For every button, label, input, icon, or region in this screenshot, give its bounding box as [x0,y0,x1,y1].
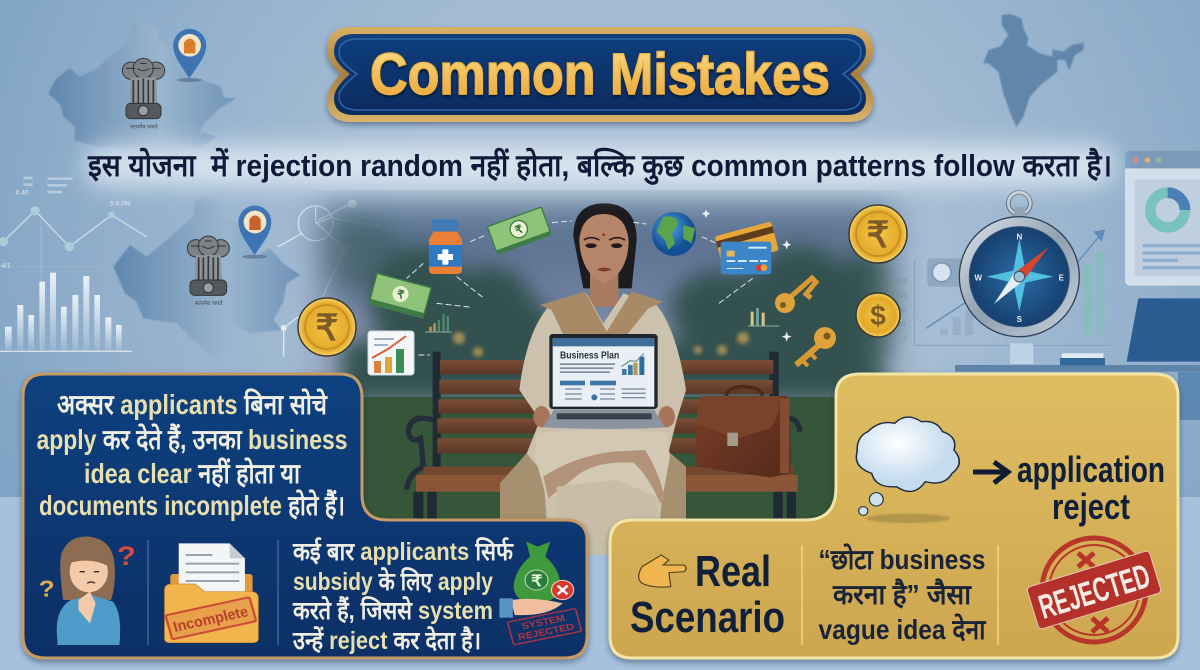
emblem upper: सत्यमेव जयते [130,123,159,131]
icon: compass: S [1017,315,1023,324]
grass [364,397,834,518]
text: real scenario: Real [695,547,771,596]
face [579,214,629,284]
icon: dollar coin: $ [870,300,886,331]
text: subsidy applicants: subsidy के लिए apply [293,567,493,596]
right edge dark strip [1178,372,1200,420]
hair [573,203,637,288]
text: real scenario [630,547,785,642]
text: common applicant mistakes: apply कर देते हैं, उनका business [36,423,347,455]
icon: confused woman [39,536,136,645]
laptop [543,334,665,429]
dupatta [540,292,663,335]
icon: rupee coin right [849,205,907,263]
network diagram [278,199,380,357]
icon: compass: E [1059,274,1065,283]
icon: rupee coin right: ₹ [867,214,889,255]
right background chart, window and laptop: 200 [897,278,908,285]
title banner [327,27,873,122]
stamp: system rejected: REJECTED [517,622,575,643]
text: application reject [1017,449,1165,527]
text: vague idea quote: vague idea देना [818,613,987,645]
text: vague idea quote [818,543,987,645]
emblem lower: सत्यमेव जयते [195,299,223,307]
woman with laptop [500,203,686,555]
text: subsidy applicants [292,537,515,655]
trees [300,210,910,400]
right background chart, window and laptop: 0 [903,336,907,343]
emblem lower [187,236,229,307]
subtitle: इस योजना में rejection random नहीं होता, बल्कि कुछ common patterns follow करता है। [87,147,1112,185]
panel: gold real scenario [610,374,1178,658]
subtitle glow [85,146,1115,186]
icon: money bag system rejected: ₹ [531,573,543,590]
icon: growth chart card [368,331,414,375]
chart: left background line and bars [0,177,147,351]
stamp: incomplete: Incomplete [172,604,250,635]
icon: thought cloud [856,417,959,523]
hands [533,406,675,427]
india map [983,14,1084,127]
stamp: system rejected [508,608,582,645]
right background chart, window and laptop: 80 [899,307,906,314]
dashboard window [1125,151,1200,286]
icon: keys [775,278,836,366]
icon: rupee coin left [298,298,356,356]
small bar icons and dashed connectors [407,209,792,355]
map pin lower [238,205,272,259]
icon: confused woman: ? [39,577,55,602]
map: Rajasthan lower [113,197,300,360]
panel: blue mistakes [23,374,587,658]
text: common applicant mistakes: idea clear नहीं होता या [84,457,301,489]
stamp: system rejected: SYSTEM [521,613,566,632]
right background chart, window and laptop: 100 [897,292,908,299]
icon: rupee coin left: ₹ [316,307,338,348]
lap [535,430,670,502]
text: application reject: reject [1052,486,1130,527]
briefcase [696,387,791,477]
text: subsidy applicants: करते हैं, जिससे system [292,596,493,625]
icon: globe [652,212,696,256]
icon: dollar coin [856,293,900,337]
background vignette [0,0,1200,497]
shalwar [557,480,658,555]
stamp: rejected [1026,538,1162,642]
chart: left background line and bars: 5.9.0% [110,201,131,208]
dividers [802,545,998,645]
text: real scenario: Scenario [630,593,785,642]
dividers [148,540,278,645]
neck [590,270,618,307]
park scene [294,190,914,518]
text: common applicant mistakes [36,388,347,521]
text: common applicant mistakes: अक्सर applicants बिना सोचे [57,388,328,420]
text: subsidy applicants: उन्हें reject कर देता है। [292,626,481,655]
bokeh lights [453,332,749,357]
icon: banknotes top: ₹ [514,223,525,237]
emblem upper [122,58,165,131]
icon: compass: N [1016,232,1022,241]
text: subsidy applicants: कई बार applicants सिर्फ [292,537,515,566]
right background chart, window and laptop [897,151,1200,372]
icon: compass: W [975,274,983,283]
icon: confused woman: ? [117,542,136,571]
text: vague idea quote: “छोटा business [818,543,986,575]
icon: pointing hand [639,555,686,587]
icon: compass [959,192,1079,337]
text: common applicant mistakes: documents incomplete होते हैं। [39,489,345,521]
icon: credit cards [715,221,779,274]
map pin upper [173,28,207,82]
icon: medicine bottle [429,219,462,274]
title: Common Mistakes [370,42,830,107]
chart: left background line and bars: 4/1 [1,263,11,270]
arrow [973,462,1008,483]
right background chart, window and laptop: 50 [899,322,906,329]
icon: incomplete folder [165,543,258,643]
left lower background band [0,497,1200,670]
icon: banknotes top [487,207,552,255]
chart: left background line and bars: 0.40 [16,190,29,197]
bench [407,352,800,522]
kurta [500,293,686,555]
text: vague idea quote: करना है” जैसा [832,578,973,610]
laptop heading: Business Plan [560,350,619,361]
icon: money bag system rejected [499,542,582,645]
map: Rajasthan upper [48,19,236,148]
icon: banknotes left [369,273,431,319]
icon: banknotes left: ₹ [395,288,405,302]
